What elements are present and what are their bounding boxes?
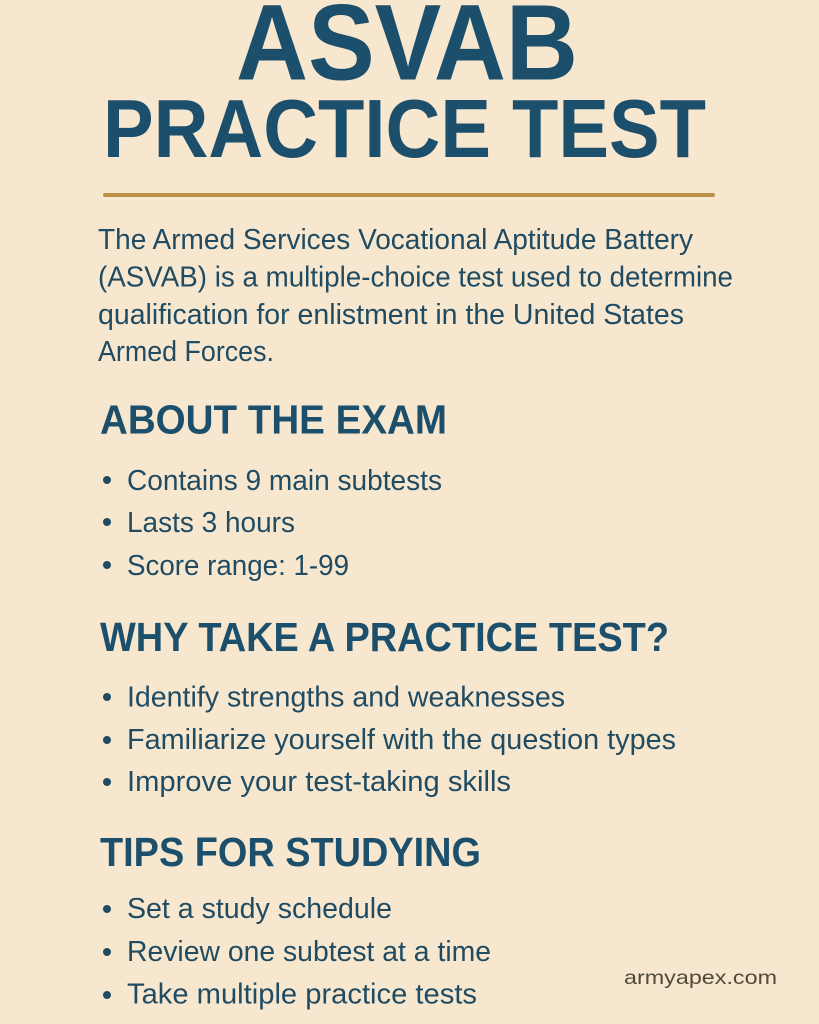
intro paragraph: qualification for enlistment in the United States xyxy=(98,299,684,331)
intro paragraph: The Armed Services Vocational Aptitude Battery xyxy=(98,224,694,256)
bullet list: about the exam xyxy=(103,465,442,582)
intro paragraph: (ASVAB) is a multiple-choice test used to determine xyxy=(98,262,733,294)
intro paragraph: Armed Forces. xyxy=(98,336,274,368)
section: about the exam xyxy=(100,396,447,582)
website credit: armyapex.com xyxy=(624,967,777,989)
bullet list: about the exam: Score range: 1-99 xyxy=(127,550,349,582)
heading: about the exam: ABOUT THE EXAM xyxy=(100,396,447,442)
title: practice test: PRACTICE TEST xyxy=(103,82,706,175)
intro paragraph xyxy=(98,224,733,368)
heading: tips for studying: TIPS FOR STUDYING xyxy=(100,829,481,875)
bullet list: why take a practice test xyxy=(103,682,676,798)
bullet list: why take a practice test: Improve your test-taking skills xyxy=(127,766,511,798)
bullet list: tips for studying: Set a study schedule xyxy=(127,893,392,925)
bullet list: about the exam: Lasts 3 hours xyxy=(127,507,295,539)
divider rule xyxy=(103,193,715,197)
bullet list: tips for studying: Take multiple practice tests xyxy=(127,978,477,1010)
heading: why take a practice test: WHY TAKE A PRACTICE TEST? xyxy=(100,614,669,660)
section: why take a practice test xyxy=(100,614,676,798)
bullet list: about the exam: Contains 9 main subtests xyxy=(127,465,442,497)
section: tips for studying xyxy=(100,829,491,1010)
bullet list: tips for studying xyxy=(103,893,491,1010)
bullet list: why take a practice test: Familiarize yourself with the question types xyxy=(127,724,676,756)
bullet list: tips for studying: Review one subtest at a time xyxy=(127,936,491,968)
bullet list: why take a practice test: Identify strengths and weaknesses xyxy=(127,682,565,714)
